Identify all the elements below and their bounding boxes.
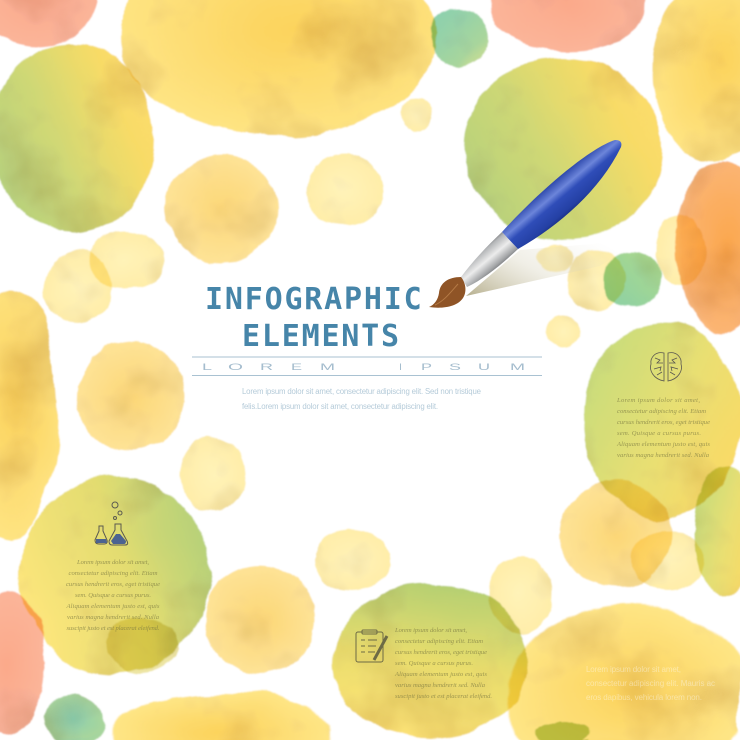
subtitle band: O bbox=[228, 362, 243, 372]
brush shadow bbox=[466, 240, 640, 296]
title bbox=[205, 282, 423, 354]
title: ELEMENTS bbox=[242, 319, 401, 354]
panel: bottom right text bbox=[586, 665, 715, 702]
title: INFOGRAPHIC bbox=[205, 282, 423, 317]
flask text: sem. Quisque a cursus purus. bbox=[75, 592, 151, 599]
brain text: cursus hendrerit eros, eget tristique bbox=[617, 419, 710, 426]
subtitle band: E bbox=[291, 362, 302, 372]
panel: brain bbox=[616, 353, 710, 459]
clipboard text: varius magna hendrerit sed. Nulla bbox=[395, 682, 486, 689]
clipboard text: consectetur adipiscing elit. Etiam bbox=[395, 638, 483, 645]
intro text: felis.Lorem ipsum dolor sit amet, consectetur adipiscing elit. bbox=[242, 402, 438, 411]
intro text bbox=[242, 387, 481, 411]
panel: bottom right text: eros dapibus, vehicula lorem non. bbox=[586, 693, 702, 702]
subtitle band: P bbox=[421, 362, 432, 372]
brain text: consectetur adipiscing elit. Etiam bbox=[617, 408, 706, 415]
panel: clipboard bbox=[356, 627, 492, 700]
icon: brain bbox=[651, 353, 681, 381]
icon: paintbrush bbox=[429, 140, 621, 308]
subtitle band: M bbox=[320, 362, 335, 372]
subtitle band: L bbox=[202, 362, 212, 372]
panel: flasks bbox=[66, 502, 160, 632]
subtitle band: R bbox=[260, 362, 274, 372]
panel: bottom right text: Lorem ipsum dolor sit amet, bbox=[586, 665, 681, 674]
clipboard text: Lorem ipsum dolor sit amet, bbox=[394, 627, 467, 634]
brain text: varius magna hendrerit sed. Nulla bbox=[617, 452, 710, 459]
clipboard text bbox=[394, 627, 492, 700]
clipboard text: Aliquam elementum justo est, quis bbox=[394, 671, 487, 678]
clipboard text: cursus hendrerit eros, eget tristique bbox=[395, 649, 487, 656]
flask text: Aliquam elementum justo est, quis bbox=[66, 603, 160, 610]
subtitle band: I bbox=[399, 362, 402, 372]
icon: clipboard bbox=[356, 630, 387, 662]
brain text: Aliquam elementum justo est, quis bbox=[616, 441, 710, 448]
intro text: Lorem ipsum dolor sit amet, consectetur adipiscing elit. Sed non tristique bbox=[242, 387, 481, 396]
brain text bbox=[616, 397, 710, 459]
flask text: consectetur adipiscing elit. Etiam bbox=[68, 570, 158, 577]
brain text: sem. Quisque a cursus purus. bbox=[617, 430, 701, 437]
flask text: suscipit justo et est placerat eleifend. bbox=[66, 625, 160, 632]
flask text: cursus hendrerit eros, eget tristique bbox=[66, 581, 160, 588]
icon: flasks bbox=[95, 502, 128, 545]
subtitle band bbox=[192, 357, 542, 376]
subtitle band: M bbox=[510, 362, 525, 372]
brain text: Lorem ipsum dolor sit amet, bbox=[616, 397, 700, 404]
subtitle band: U bbox=[478, 362, 490, 372]
flask text bbox=[66, 559, 160, 632]
clipboard text: suscipit justo et est placerat eleifend. bbox=[395, 693, 492, 700]
panel: bottom right text: consectetur adipiscing elit. Mauris ac bbox=[586, 679, 715, 688]
clipboard text: sem. Quisque a cursus purus. bbox=[395, 660, 473, 667]
subtitle band: S bbox=[449, 362, 461, 372]
flask text: varius magna hendrerit sed. Nulla bbox=[67, 614, 160, 621]
flask text: Lorem ipsum dolor sit amet, bbox=[76, 559, 149, 566]
